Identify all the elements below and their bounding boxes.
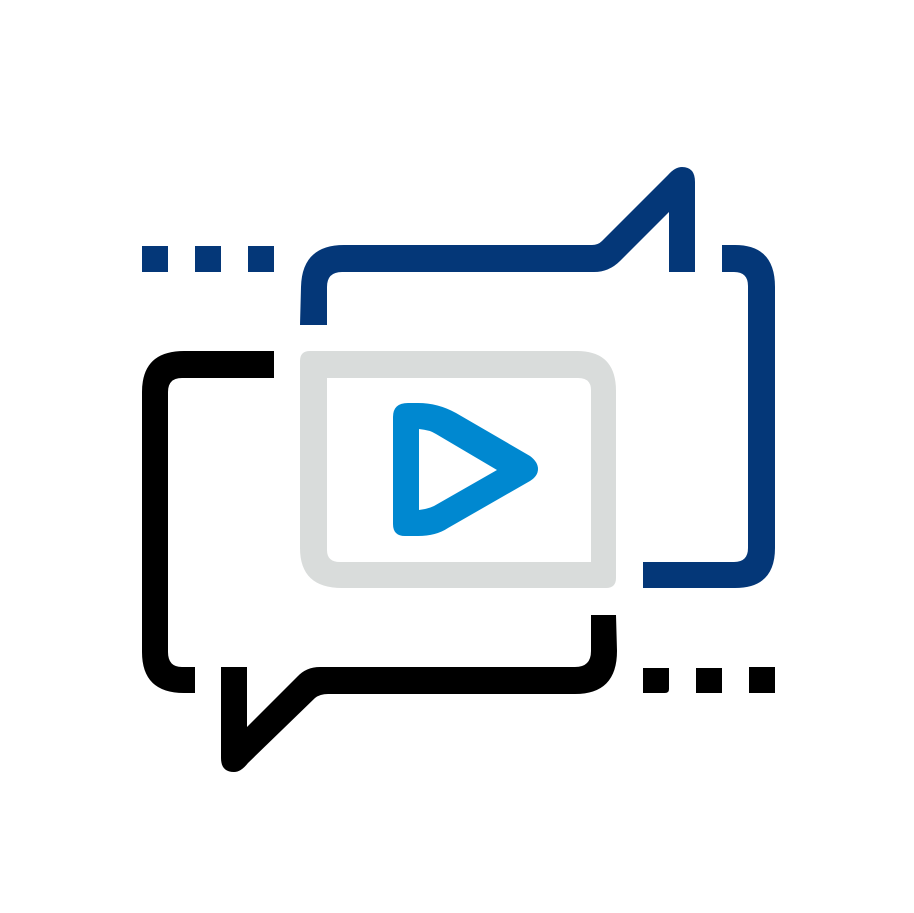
black speech bubble upper part (142, 351, 274, 693)
navy speech bubble right part (643, 245, 775, 588)
blue play button (393, 403, 538, 536)
black speech bubble lower part with tail (221, 615, 617, 772)
navy speech bubble left part with tail (300, 167, 695, 325)
grey video frame (300, 351, 616, 588)
black dots bottom right (643, 667, 775, 693)
navy dots top left (142, 246, 274, 272)
